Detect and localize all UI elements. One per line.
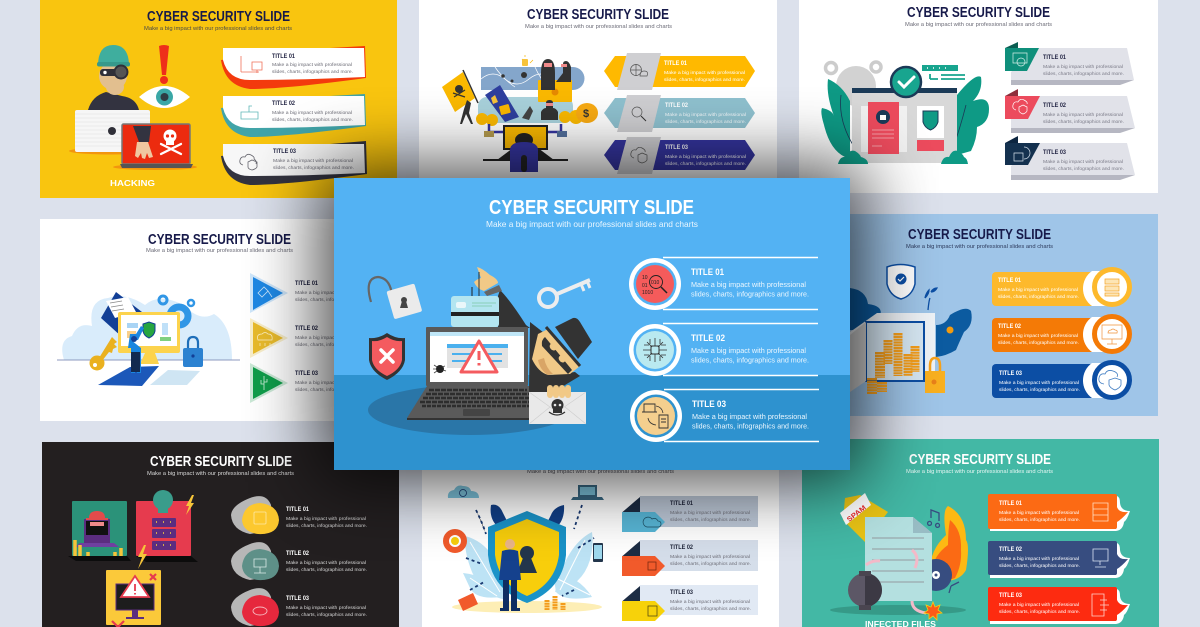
- icon: binary magnifier: 1010: [642, 290, 653, 296]
- card: title 01: Make a big impact with professional: [999, 510, 1079, 516]
- card: title 01: Make a big impact with professional: [1043, 64, 1123, 70]
- subheading: Make a big impact with our professional slides and charts: [146, 248, 293, 254]
- card: title 03: slides, charts, infographics and more.: [999, 609, 1080, 615]
- illustration: shield with person: [446, 485, 604, 613]
- card: title 01: [988, 494, 1130, 531]
- card: title 03: slides, charts, infographics and more.: [670, 606, 751, 612]
- illustration: hackers and money bags: $: [583, 108, 589, 120]
- illustration: safe with coins and padlock: [850, 264, 972, 394]
- text: title 02: TITLE 02: [295, 325, 318, 332]
- card: title 02: TITLE 02: [670, 544, 693, 551]
- card: title 02: [988, 541, 1130, 578]
- text: title 03: slides, charts, infographics and more.: [295, 387, 376, 393]
- item: title 01: Make a big impact with professional: [286, 516, 366, 522]
- item: title 01: TITLE 01: [286, 506, 309, 513]
- card: title 01: Make a big impact with professional: [670, 510, 750, 516]
- text: title 03: Make a big impact with professional: [295, 380, 375, 386]
- text: title 02: slides, charts, infographics and more.: [691, 358, 809, 364]
- card: title 01: [992, 270, 1130, 306]
- card: title 02: Make a big impact with professional: [272, 110, 352, 116]
- card: title 01: slides, charts, infographics and more.: [670, 517, 751, 523]
- text: title 01: [295, 280, 376, 303]
- panel: yellow hacking slide: [40, 0, 397, 198]
- card: title 01: TITLE 01: [1043, 54, 1066, 61]
- subheading: Make a big impact with our professional slides and charts: [525, 24, 672, 30]
- heading: CYBER SECURITY SLIDE: [527, 7, 669, 23]
- card: title 02: TITLE 02: [999, 546, 1022, 553]
- illustration: monitor, key and lock: [57, 292, 240, 386]
- icon: binary magnifier: 10: [642, 275, 648, 281]
- subheading: Make a big impact with our professional slides and charts: [527, 469, 674, 475]
- item: title 03: [231, 588, 367, 626]
- panel: teal infected files slide: [802, 439, 1159, 627]
- card: title 03: TITLE 03: [999, 370, 1022, 377]
- card: title 03: [1005, 136, 1135, 180]
- illustration: hackers and money bags: [442, 55, 598, 172]
- card: title 03: slides, charts, infographics and more.: [273, 165, 354, 171]
- illustration: warning monitor card: [106, 570, 161, 627]
- illustration: skull envelope: [529, 385, 586, 424]
- card: title 01: Make a big impact with professional: [998, 287, 1078, 293]
- heading: CYBER SECURITY SLIDE: [147, 9, 290, 25]
- card: title 03: TITLE 03: [999, 592, 1022, 599]
- card: title 01: TITLE 01: [998, 277, 1021, 284]
- text: title 03: [692, 399, 809, 430]
- heading: CYBER SECURITY SLIDE: [909, 452, 1051, 468]
- item: title 02: TITLE 02: [286, 550, 309, 557]
- subheading: Make a big impact with our professional slides and charts: [906, 244, 1053, 250]
- illustration: spy in hat: [529, 318, 592, 392]
- card: title 03: [221, 141, 367, 185]
- item: title 02: Make a big impact with professional: [286, 560, 366, 566]
- heading: CYBER SECURITY SLIDE: [148, 232, 291, 248]
- card: title 01: TITLE 01: [272, 53, 295, 60]
- subheading: Make a big impact with our professional slides and charts: [906, 469, 1053, 475]
- icon: binary magnifier: 010: [651, 280, 660, 286]
- icon: device sync: [642, 404, 668, 428]
- text: title 03: Make a big impact with professional: [692, 414, 807, 421]
- text: title 01: Make a big impact with professional: [691, 282, 806, 289]
- card: title 03: Make a big impact with professional: [670, 599, 750, 605]
- card: title 02: slides, charts, infographics and more.: [272, 117, 353, 123]
- text: title 01: slides, charts, infographics and more.: [295, 297, 376, 303]
- card: title 01: [221, 46, 366, 89]
- icon: binary magnifier: 01: [642, 283, 648, 289]
- subheading: Make a big impact with our professional slides and charts: [486, 220, 698, 229]
- text: title 01: slides, charts, infographics and more.: [691, 292, 809, 298]
- card: title 02: slides, charts, infographics and more.: [665, 119, 746, 125]
- card: title 02: [622, 540, 758, 576]
- illustration: laptop with warning: [407, 327, 544, 420]
- card: title 01: Make a big impact with professional: [664, 70, 745, 76]
- text: title 01: TITLE 01: [691, 267, 725, 278]
- card: title 03: TITLE 03: [665, 144, 688, 151]
- item: title 01: slides, charts, infographics and more.: [286, 523, 367, 529]
- heading: CYBER SECURITY SLIDE: [907, 5, 1050, 21]
- card: title 01: slides, charts, infographics and more.: [664, 77, 745, 83]
- subheading: Make a big impact with our professional slides and charts: [905, 22, 1052, 28]
- icon: green triangle: [250, 363, 288, 403]
- panel: black slide: [42, 442, 399, 627]
- card: title 02: slides, charts, infographics and more.: [1043, 119, 1124, 125]
- panel: light blue safe slide: [801, 214, 1158, 416]
- card: title 03: [988, 587, 1130, 624]
- card: title 02: [221, 94, 366, 137]
- card: title 02: Make a big impact with professional: [665, 112, 746, 118]
- illustration: hand with phishing hook and card: [451, 267, 530, 328]
- item: title 02: [629, 324, 818, 376]
- central slide shadow: [320, 166, 864, 482]
- item: title 01: [629, 258, 818, 310]
- illustration: infected files: [830, 493, 968, 620]
- card: title 02: TITLE 02: [1043, 102, 1066, 109]
- card: title 02: Make a big impact with professional: [1043, 112, 1123, 118]
- card: title 01: slides, charts, infographics and more.: [272, 69, 353, 75]
- card: title 02: TITLE 02: [272, 100, 295, 107]
- illustration: server card: [136, 490, 198, 569]
- card: title 02: Make a big impact with professional: [999, 556, 1079, 562]
- card: title 01: TITLE 01: [670, 500, 693, 507]
- text: title 03: [295, 370, 376, 393]
- card: title 02: [604, 95, 755, 132]
- heading: CYBER SECURITY SLIDE: [150, 454, 292, 470]
- text: title 02: Make a big impact with professional: [295, 335, 375, 341]
- card: title 03: Make a big impact with professional: [999, 602, 1079, 608]
- panel: white ransom slide: [419, 0, 777, 202]
- card: title 01: Make a big impact with professional: [272, 62, 352, 68]
- text: title 02: [295, 325, 376, 348]
- illustration: protected browser window: [821, 62, 989, 164]
- card: title 02: slides, charts, infographics and more.: [670, 561, 751, 567]
- icon: yellow triangle: [250, 318, 288, 358]
- card: title 03: TITLE 03: [670, 589, 693, 596]
- card: title 01: TITLE 01: [664, 60, 687, 67]
- card: title 01: [604, 53, 755, 90]
- icon: binary magnifier: [642, 275, 667, 296]
- icon: red shield: [369, 333, 405, 380]
- card: title 01: slides, charts, infographics and more.: [999, 517, 1080, 523]
- text: title 03: TITLE 03: [692, 399, 726, 410]
- card: title 03: Make a big impact with professional: [1043, 159, 1123, 165]
- card: title 01: [622, 496, 758, 532]
- subheading: Make a big impact with our professional slides and charts: [144, 26, 292, 32]
- card: title 02: Make a big impact with professional: [670, 554, 750, 560]
- card: title 03: Make a big impact with professional: [999, 380, 1079, 386]
- card: title 03: TITLE 03: [273, 148, 296, 155]
- card: title 03: TITLE 03: [1043, 149, 1066, 156]
- heading: CYBER SECURITY SLIDE: [489, 197, 694, 219]
- item: title 03: TITLE 03: [286, 595, 309, 602]
- card: title 03: [622, 585, 758, 621]
- card: title 03: [992, 362, 1130, 398]
- icon: open padlock: [369, 277, 422, 319]
- item: title 01: [231, 496, 367, 534]
- card: title 03: slides, charts, infographics and more.: [665, 161, 746, 167]
- icon: blue triangle: [250, 273, 288, 313]
- illustration: infected files: SPAM: [846, 504, 868, 524]
- icon: key: [539, 280, 590, 307]
- card: title 01: slides, charts, infographics and more.: [998, 294, 1079, 300]
- card: title 03: Make a big impact with professional: [273, 158, 353, 164]
- card: title 02: TITLE 02: [665, 102, 688, 109]
- card: title 03: slides, charts, infographics and more.: [999, 387, 1080, 393]
- item: title 02: slides, charts, infographics and more.: [286, 567, 367, 573]
- panel: white shield keyhole slide: [422, 440, 779, 627]
- text: title 02: slides, charts, infographics and more.: [295, 342, 376, 348]
- item: title 03: [630, 390, 819, 442]
- panel: white shield slide: [799, 0, 1158, 193]
- card: title 01: [1005, 42, 1134, 85]
- item: title 03: Make a big impact with professional: [286, 605, 366, 611]
- card: title 01: TITLE 01: [999, 500, 1022, 507]
- card: title 01: slides, charts, infographics and more.: [1043, 71, 1124, 77]
- card: title 02: TITLE 02: [998, 323, 1021, 330]
- card: title 02: [1005, 89, 1135, 133]
- illustration: hacker with laptops: [69, 45, 197, 170]
- card: title 02: slides, charts, infographics and more.: [998, 340, 1079, 346]
- label: hacking: HACKING: [110, 178, 155, 188]
- text: title 03: TITLE 03: [295, 370, 318, 377]
- text: title 03: slides, charts, infographics and more.: [692, 424, 809, 430]
- heading: CYBER SECURITY SLIDE: [908, 227, 1051, 243]
- text: title 01: Make a big impact with professional: [295, 290, 375, 296]
- card: title 02: slides, charts, infographics and more.: [999, 563, 1080, 569]
- text: title 01: TITLE 01: [295, 280, 318, 287]
- illustration: hacker card: [68, 501, 131, 561]
- illustration: laptop shadow: [368, 385, 572, 435]
- text: title 02: Make a big impact with professional: [691, 348, 806, 355]
- item: title 03: slides, charts, infographics and more.: [286, 612, 367, 618]
- item: title 02: [231, 542, 367, 580]
- text: title 02: [691, 333, 809, 364]
- text: title 01: [691, 267, 809, 298]
- card: title 02: [992, 316, 1130, 352]
- icon: exclamation mark: [159, 45, 169, 84]
- card: title 02: Make a big impact with professional: [998, 333, 1078, 339]
- card: title 03: [604, 137, 755, 174]
- card: title 03: slides, charts, infographics and more.: [1043, 166, 1124, 172]
- icon: eye: [139, 86, 190, 108]
- text: title 02: TITLE 02: [691, 333, 725, 344]
- icon: microchip: [643, 338, 667, 362]
- panel: white computer slide: [40, 219, 397, 421]
- card: title 03: Make a big impact with professional: [665, 154, 746, 160]
- panel: central blue slide: [334, 178, 850, 470]
- subheading: Make a big impact with our professional slides and charts: [147, 471, 294, 477]
